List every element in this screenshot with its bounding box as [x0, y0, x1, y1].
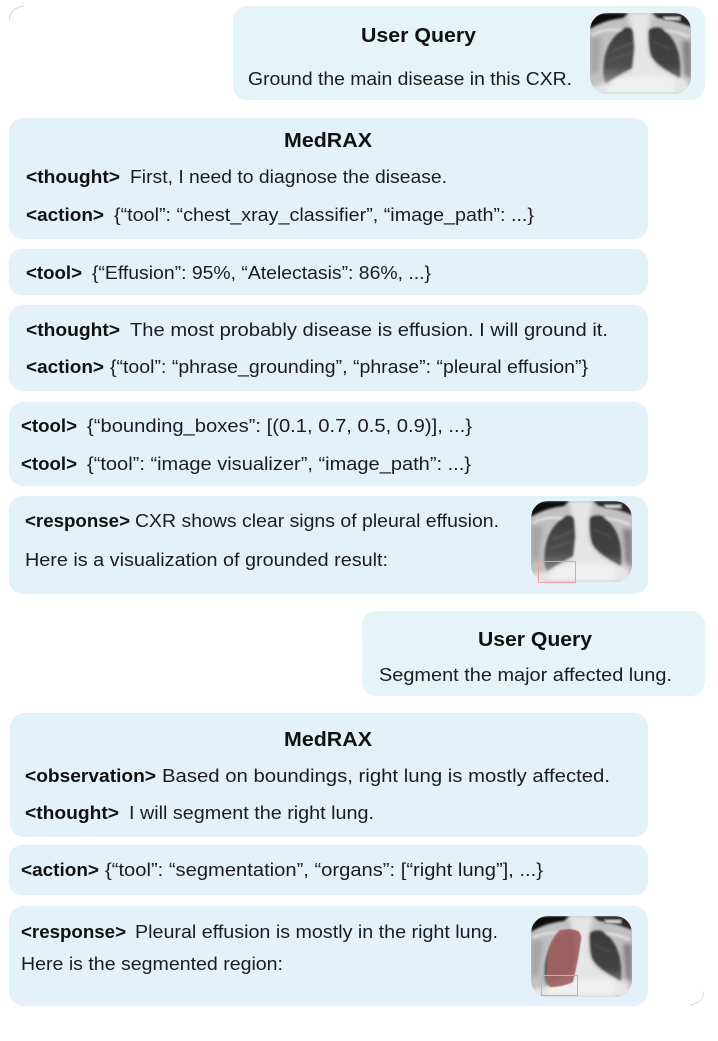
image: x-ray with bounding box: [531, 501, 632, 582]
panel: grounding tool outputs: <tool>: [21, 454, 77, 474]
panel: MedRAX observation and thought: <observation>: [25, 766, 156, 786]
panel: classifier tool output: <tool>: [26, 263, 82, 283]
panel: segmented response: <response>: [21, 922, 126, 942]
panel: grounding thought and action: <thought>: [26, 320, 120, 340]
panel: grounded response: CXR shows clear signs of pleural effusion.: [135, 510, 499, 531]
panel: grounding tool outputs: {“bounding_boxes”: [(0.1, 0.7, 0.5, 0.9)], ...}: [87, 415, 472, 437]
panel: segmented response: [9, 906, 648, 1006]
panel: first user query: [233, 6, 705, 100]
panel: grounding tool outputs: {“tool”: “image visualizer”, “image_path”: ...}: [87, 453, 471, 475]
text: first thought: <thought>: [26, 167, 120, 187]
panel: second user query: [362, 611, 705, 696]
panel: second user query: Segment the major affected lung.: [379, 664, 672, 685]
panel: segmented response: Here is the segmented region:: [21, 953, 283, 974]
panel: grounding thought and action: The most probably disease is effusion. I will ground it.: [130, 319, 608, 340]
panel: grounded response: <response>: [25, 511, 130, 531]
panel: classifier tool output: [9, 249, 648, 295]
image: chest x-ray: [590, 13, 691, 94]
corner mark: top-left: [9, 6, 24, 20]
text: first thought: First, I need to diagnose the disease.: [130, 166, 447, 187]
panel: MedRAX observation and thought: Based on boundings, right lung is mostly affected.: [162, 765, 610, 786]
panel: MedRAX observation and thought: MedRAX: [284, 729, 373, 751]
text: user request: Ground the main disease in this CXR.: [248, 68, 572, 89]
image: x-ray with segmented lung: [531, 916, 632, 997]
panel: segmentation action: {“tool”: “segmentation”, “organs”: [“right lung”], ...}: [105, 859, 543, 880]
panel: classifier tool output: {“Effusion”: 95%, “Atelectasis”: 86%, ...}: [92, 262, 431, 283]
panel: grounding tool outputs: [9, 402, 648, 486]
panel: MedRAX observation and thought: <thought>: [25, 803, 119, 823]
panel: MedRAX observation and thought: [10, 713, 648, 837]
corner mark: bottom-right: [690, 991, 704, 1005]
panel: grounded response: [9, 496, 648, 594]
panel: segmented response: Pleural effusion is mostly in the right lung.: [135, 921, 498, 942]
panel: grounding thought and action: [9, 305, 648, 391]
text: first action: {“tool”: “chest_xray_classifier”, “image_path”: ...}: [114, 204, 534, 226]
panel: segmentation action: [9, 845, 648, 895]
panel: grounding thought and action: <action>: [26, 357, 104, 377]
panel: segmentation action: <action>: [21, 860, 99, 880]
heading: user query: User Query: [361, 25, 477, 47]
panel: MedRAX thought and action: [9, 118, 648, 239]
text: first action: <action>: [26, 205, 104, 225]
panel: grounded response: Here is a visualization of grounded result:: [25, 549, 388, 570]
panel: second user query: User Query: [478, 629, 593, 651]
panel: MedRAX observation and thought: I will segment the right lung.: [129, 802, 374, 823]
heading: MedRAX: MedRAX: [284, 130, 373, 152]
panel: grounding tool outputs: <tool>: [21, 416, 77, 436]
panel: grounding thought and action: {“tool”: “phrase_grounding”, “phrase”: “pleural effusion”}: [110, 356, 588, 378]
